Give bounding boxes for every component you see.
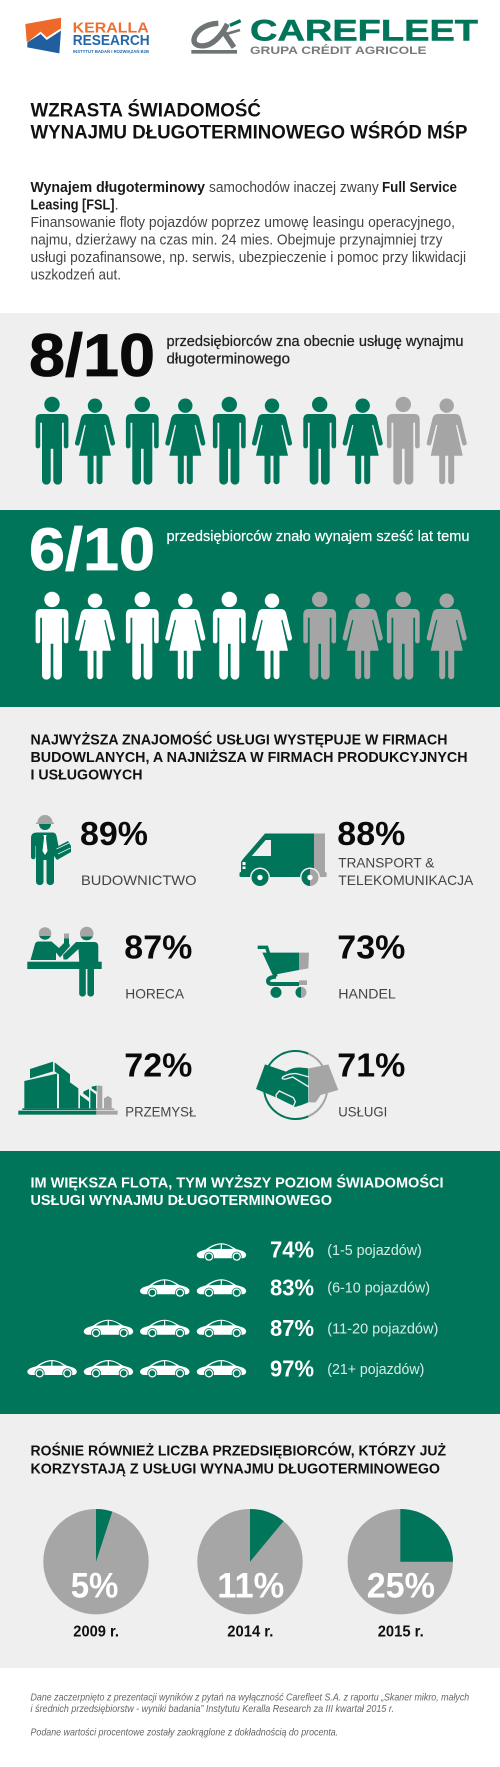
people row: 6 of 10 white xyxy=(36,592,467,680)
stat: retail: 73% xyxy=(337,929,405,966)
stat: transport: 88% xyxy=(337,816,405,853)
stat: services: 71% xyxy=(337,1048,405,1085)
pie chart: 2015 xyxy=(348,1509,453,1641)
heading: KORZYSTAJĄ Z USŁUGI WYNAJMU DŁUGOTERMINOWEGO xyxy=(30,1460,440,1477)
icon: hospitality counter xyxy=(27,927,102,997)
pie chart: 2014: 11% xyxy=(217,1567,284,1606)
logo: Keralla Research: INSTYTUT BADAŃ I ROZWIĄZAŃ B2B xyxy=(73,49,149,54)
intro text block: . xyxy=(114,196,119,214)
stat: horeca xyxy=(124,929,192,1001)
stat: manufacturing xyxy=(124,1048,196,1120)
stat: manufacturing: PRZEMYSŁ xyxy=(125,1104,196,1120)
title: WZRASTA ŚWIADOMOŚĆ xyxy=(30,100,261,122)
row: 1-5 vehicles xyxy=(197,1237,422,1263)
icon: factory xyxy=(18,1062,118,1115)
stat: transport: TELEKOMUNIKACJA xyxy=(338,872,474,888)
logo: Keralla Research: RESEARCH xyxy=(73,33,150,49)
title: WYNAJMU DŁUGOTERMINOWEGO WŚRÓD MŚP xyxy=(30,122,468,144)
pie chart: 2014: 2014 r. xyxy=(227,1624,273,1641)
heading: I USŁUGOWYCH xyxy=(30,766,142,783)
heading: USŁUGI WYNAJMU DŁUGOTERMINOWEGO xyxy=(30,1192,332,1209)
stat: transport: TRANSPORT & xyxy=(338,854,435,870)
row: 11-20 vehicles: 87% xyxy=(270,1315,314,1341)
statistic 8/10: 8/10 xyxy=(29,322,155,389)
heading xyxy=(30,1173,444,1209)
heading: ROŚNIE RÓWNIEŻ LICZBA PRZEDSIĘBIORCÓW, KTÓRZY JUŻ xyxy=(30,1442,446,1460)
description: przedsiębiorców znało wynajem sześć lat temu xyxy=(166,529,470,545)
stat: services xyxy=(337,1048,405,1120)
stat: horeca: 87% xyxy=(124,929,192,966)
stat: retail xyxy=(337,929,405,1001)
intro text block: Leasing [FSL] xyxy=(30,196,115,214)
stat: construction xyxy=(80,816,197,888)
stat: construction: BUDOWNICTWO xyxy=(81,872,197,888)
stat: retail: HANDEL xyxy=(338,985,396,1001)
footnote: i średnich przedsiębiorstw - wyniki badania” Instytutu Keralla Research za III kwartał 2015 r. xyxy=(30,1704,394,1715)
icon: handshake xyxy=(256,1051,338,1119)
row: 6-10 vehicles xyxy=(140,1275,430,1301)
stat: manufacturing: 72% xyxy=(124,1048,192,1085)
description xyxy=(166,334,464,368)
intro text block: najmu, dzierżawy na czas min. 24 mies. Obejmuje przynajmniej trzy xyxy=(30,231,443,248)
stat: transport xyxy=(337,816,474,888)
row: 1-5 vehicles: 74% xyxy=(270,1237,314,1263)
heading: BUDOWLANYCH, A NAJNIŻSZA W FIRMACH PRODUKCYJNYCH xyxy=(30,749,468,766)
row: 6-10 vehicles: 83% xyxy=(270,1275,314,1301)
pie chart: 2015: 2015 r. xyxy=(378,1624,424,1641)
people row: 8 of 10 green xyxy=(36,397,467,485)
intro text block: Wynajem długoterminowy xyxy=(30,179,206,196)
footnote: Podane wartości procentowe zostały zaokrąglone z dokładnością do procenta. xyxy=(30,1727,338,1738)
heading xyxy=(30,1442,446,1477)
intro text block: Full Service xyxy=(382,179,457,196)
row: 11-20 vehicles xyxy=(84,1315,438,1341)
panel: 6/10 xyxy=(0,510,500,707)
panel: 8/10 xyxy=(0,313,500,510)
icon: delivery van xyxy=(240,834,327,888)
logo: Carefleet xyxy=(191,15,478,57)
intro text block xyxy=(30,179,466,283)
title xyxy=(30,100,468,144)
pie chart: 2014 xyxy=(197,1509,303,1641)
statistic 6/10: 6/10 xyxy=(29,516,155,583)
panel: industries xyxy=(0,707,500,1151)
intro text block: usługi pozafinansowe, np. serwis, ubezpieczenie i pomoc przy likwidacji xyxy=(30,249,466,266)
logo: Keralla Research: KERALLA xyxy=(73,20,149,36)
footnote xyxy=(30,1693,469,1738)
row: 21+ vehicles: 97% xyxy=(270,1356,314,1382)
panel: fleet size xyxy=(0,1151,500,1414)
row: 11-20 vehicles: (11-20 pojazdów) xyxy=(327,1321,438,1337)
intro text block: uszkodzeń aut. xyxy=(30,266,121,283)
description: długoterminowego xyxy=(166,352,290,368)
description: przedsiębiorców zna obecnie usługę wynajmu xyxy=(166,334,464,350)
heading: NAJWYŻSZA ZNAJOMOŚĆ USŁUGI WYSTĘPUJE W FIRMACH xyxy=(30,730,448,748)
icon: construction worker xyxy=(31,815,71,885)
icon: shopping cart xyxy=(258,947,309,998)
row: 6-10 vehicles: (6-10 pojazdów) xyxy=(327,1281,430,1297)
pie chart: 2009: 5% xyxy=(71,1567,118,1606)
stat: construction: 89% xyxy=(80,816,148,853)
intro text block: samochodów inaczej zwany xyxy=(209,179,379,196)
logo: Carefleet: CAREFLEET xyxy=(250,15,478,48)
stat: services: USŁUGI xyxy=(338,1104,387,1120)
pie chart: 2015: 25% xyxy=(367,1567,435,1606)
row: 21+ vehicles: (21+ pojazdów) xyxy=(327,1362,424,1378)
pie chart: 2009 xyxy=(43,1509,149,1641)
heading: IM WIĘKSZA FLOTA, TYM WYŻSZY POZIOM ŚWIADOMOŚCI xyxy=(30,1173,444,1191)
intro text block: Finansowanie floty pojazdów poprzez umowę leasingu operacyjnego, xyxy=(30,214,455,231)
row: 1-5 vehicles: (1-5 pojazdów) xyxy=(327,1243,422,1259)
heading xyxy=(30,730,468,783)
stat: horeca: HORECA xyxy=(125,985,185,1001)
panel: usage growth xyxy=(0,1414,500,1668)
pie chart: 2009: 2009 r. xyxy=(73,1624,119,1641)
logo: Carefleet: GRUPA CRÉDIT AGRICOLE xyxy=(250,44,427,57)
row: 21+ vehicles xyxy=(27,1356,424,1382)
logo: Keralla Research xyxy=(25,18,150,54)
